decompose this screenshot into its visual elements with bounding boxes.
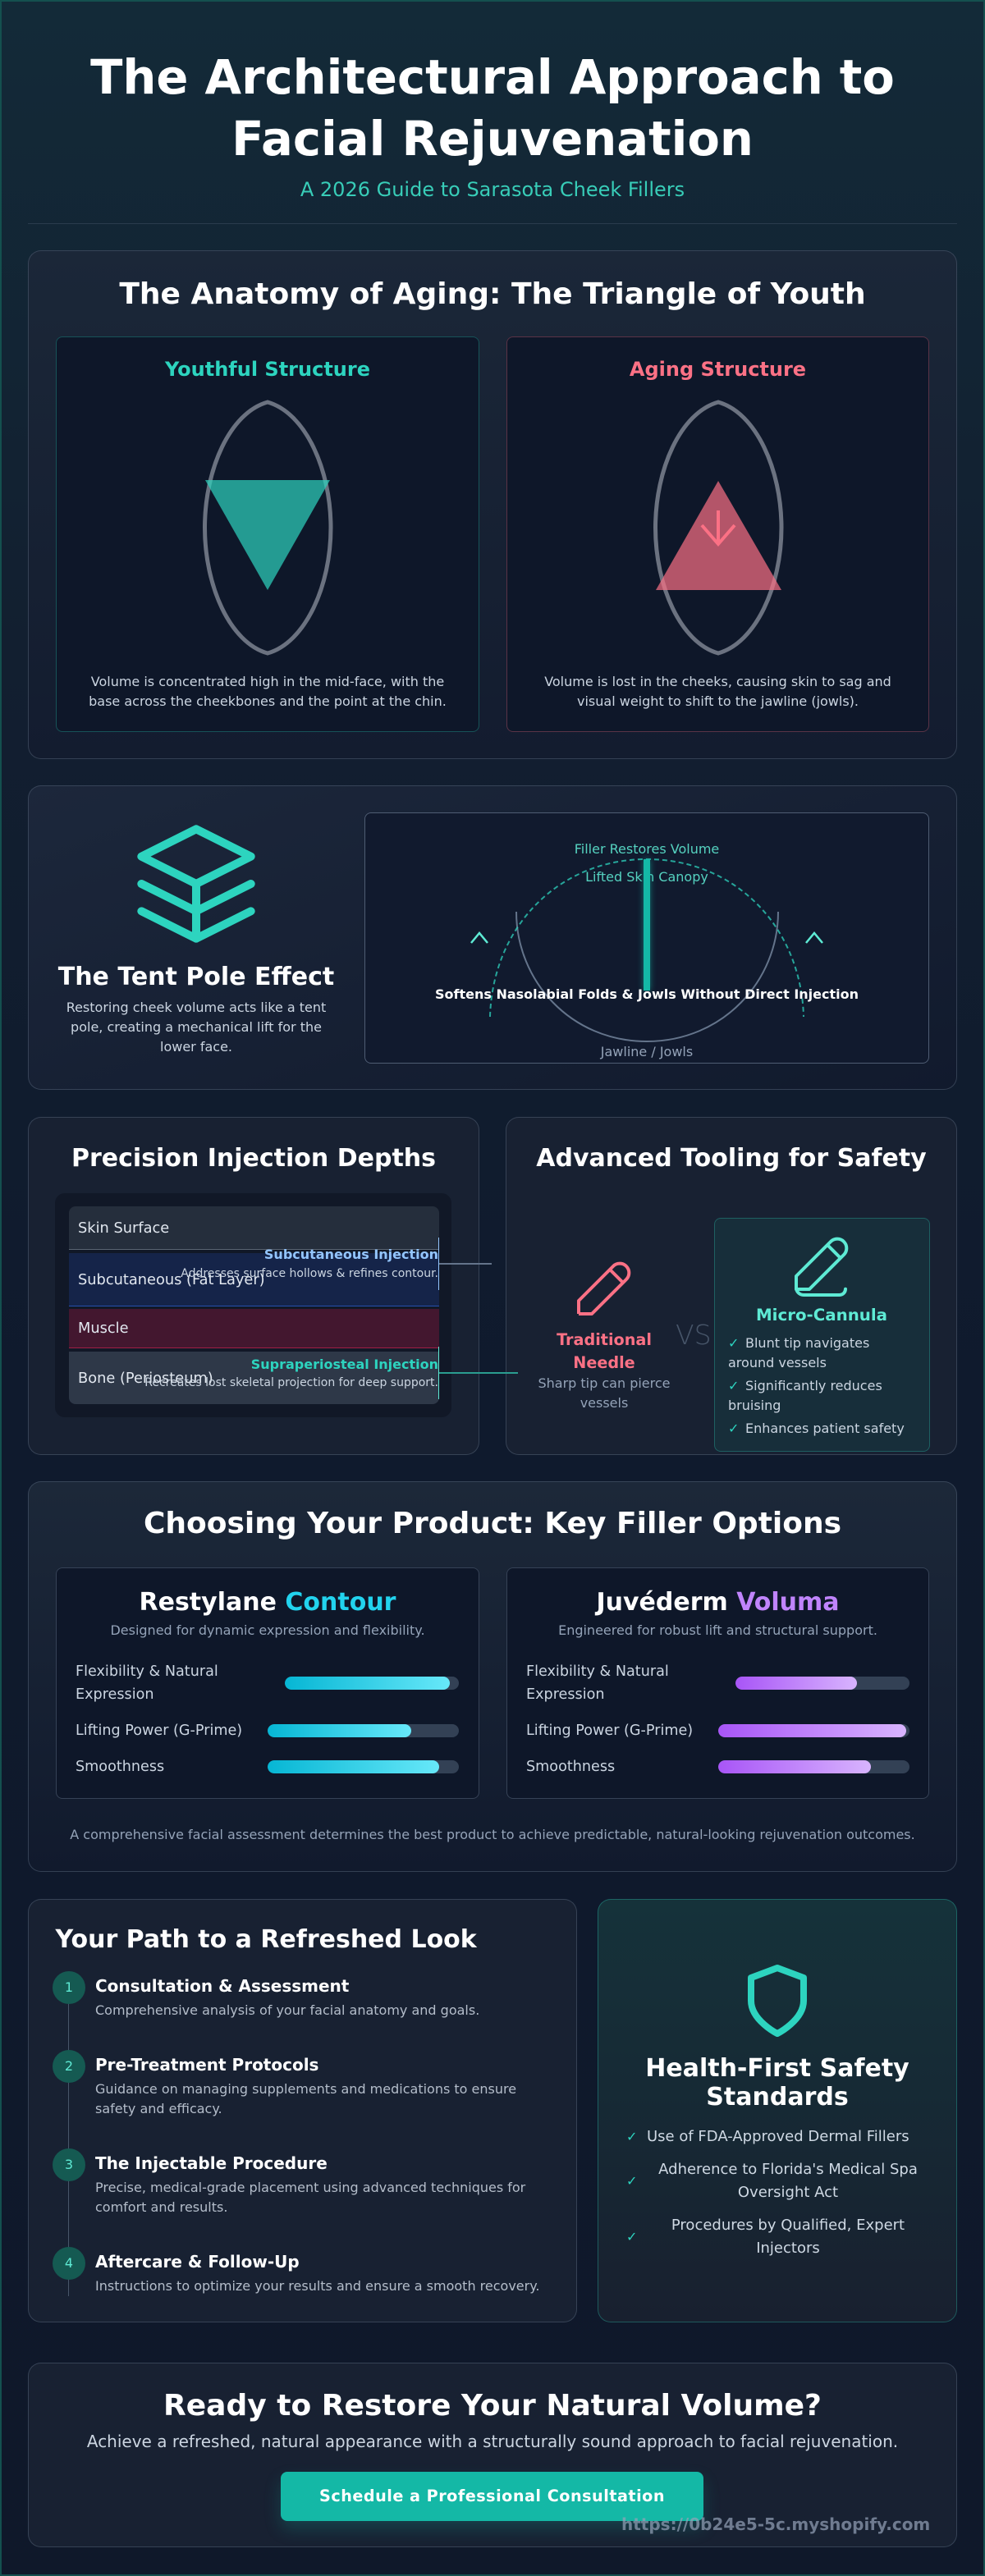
step title: Aftercare & Follow-Up (95, 2252, 300, 2272)
layer: fat (69, 1253, 439, 1306)
diagram drawing: Softens Nasolabial Folds & Jowls Without Direct Injection (435, 986, 859, 1002)
item 1 (626, 2128, 909, 2145)
heading: Standards (706, 2083, 849, 2111)
step 2 (53, 2050, 516, 2116)
benefit list (728, 1335, 905, 1436)
needle title: Traditional (557, 1330, 652, 1349)
subheading: Achieve a refreshed, natural appearance with a structurally sound approach to facial rejuvenation. (87, 2432, 898, 2451)
step number (53, 2247, 85, 2280)
connector (439, 1263, 492, 1265)
callout title: Supraperiosteal Injection (251, 1357, 438, 1372)
benefit list: around vessels Significantly reduces (728, 1355, 882, 1393)
icon: layered tent (137, 825, 255, 943)
metric: flexibility: Expression (526, 1686, 605, 1703)
step title: The Injectable Procedure (95, 2153, 328, 2173)
bar: smoothness (718, 1760, 909, 1773)
heading: Choosing Your Product: Key Filler Options (144, 1507, 841, 1540)
panel: triangle of youth (28, 250, 957, 759)
title: The Architectural Approach to (90, 50, 895, 105)
check: ✓ (626, 2129, 637, 2144)
header (28, 0, 957, 224)
metric: flexibility: Flexibility & Natural (76, 1663, 218, 1680)
panel: call to action (28, 2363, 957, 2547)
item text: Adherence to Florida's Medical Spa (658, 2161, 918, 2178)
diagram drawing: Jawline / Jowls (600, 1044, 693, 1059)
product description: Designed for dynamic expression and flexibility. (110, 1622, 425, 1638)
item text (658, 2161, 918, 2201)
footnote: A comprehensive facial assessment determines the best product to achieve predictable, natural-looking rejuvenation outcomes. (70, 1827, 915, 1842)
card: juvederm voluma (506, 1567, 929, 1799)
heading: Health-First Safety (645, 2053, 909, 2083)
step number: 3 (65, 2157, 73, 2172)
caption: Volume is lost in the cheeks, causing skin to sag and (544, 674, 891, 689)
step 3 (53, 2148, 525, 2214)
layer: skin (69, 1206, 439, 1250)
heading: Ready to Restore Your Natural Volume? (163, 2389, 822, 2423)
icon: shield (748, 1965, 807, 2037)
step number: 1 (65, 1979, 73, 1995)
heading: Precision Injection Depths (71, 1144, 436, 1173)
icon: needle (577, 1262, 630, 1315)
callout text: Recreates lost skeletal projection for deep support. (144, 1376, 438, 1389)
callout: subcutaneous (69, 1238, 439, 1290)
benefit list: bruising Enhances patient safety (728, 1398, 905, 1436)
heading: Your Path to a Refreshed Look (56, 1925, 477, 1954)
button: Schedule a Professional Consultation (319, 2487, 665, 2505)
caption (89, 674, 447, 709)
title: Facial Rejuvenation (231, 112, 754, 167)
callout title: Subcutaneous Injection (264, 1247, 438, 1262)
diagram: youthful face triangle (203, 400, 333, 655)
metric: lifting: Lifting Power (G-Prime) (526, 1723, 693, 1739)
metric: smoothness: Smoothness (76, 1759, 164, 1775)
caption (544, 674, 891, 709)
description: Restoring cheek volume acts like a tent (66, 1000, 326, 1015)
caption: base across the cheekbones and the point at the chin. (89, 693, 447, 709)
product description: Engineered for robust lift and structural support. (558, 1622, 877, 1638)
step number: 4 (65, 2255, 73, 2271)
callout text: Addresses surface hollows & refines contour. (181, 1267, 438, 1280)
description: pole, creating a mechanical lift for the (71, 1019, 322, 1035)
layer stack (55, 1193, 451, 1417)
item text: Use of FDA-Approved Dermal Fillers (647, 2128, 909, 2145)
diagram drawing (435, 841, 859, 1059)
step title: Pre-Treatment Protocols (95, 2055, 318, 2075)
step 4 (53, 2247, 540, 2293)
metric: flexibility: Flexibility & Natural (526, 1663, 669, 1680)
callout: supraperiosteal (69, 1347, 439, 1399)
title (90, 50, 895, 167)
diagram drawing: Lifted Skin Canopy (585, 869, 708, 885)
step text (95, 2180, 525, 2214)
layer: muscle (69, 1309, 439, 1348)
heading: The Anatomy of Aging: The Triangle of Youth (119, 277, 866, 311)
step text: comfort and results. (95, 2199, 227, 2214)
metric: lifting: Lifting Power (G-Prime) (76, 1723, 242, 1739)
metric: flexibility (76, 1663, 218, 1703)
card: aging structure (506, 336, 929, 732)
item text: Injectors (756, 2239, 820, 2257)
description (66, 1000, 326, 1055)
heading (645, 2053, 909, 2111)
step number (53, 1971, 85, 2004)
step text: Precise, medical-grade placement using advanced techniques for (95, 2180, 525, 2194)
panel: path to a refreshed look (28, 1899, 577, 2322)
metric: flexibility: Expression (76, 1686, 154, 1703)
card: restylane contour (56, 1567, 479, 1799)
caption: Volume is concentrated high in the mid-face, with the (91, 674, 444, 689)
step text: safety and efficacy. (95, 2101, 222, 2116)
step title: Consultation & Assessment (95, 1976, 349, 1996)
bar: smoothness (268, 1760, 459, 1773)
heading: The Tent Pole Effect (58, 963, 334, 991)
check: ✓ (626, 2229, 637, 2244)
step text: Instructions to optimize your results and ensure a smooth recovery. (95, 2278, 540, 2293)
card: micro-cannula (714, 1218, 929, 1452)
step number: 2 (65, 2058, 73, 2074)
diagram: aging face triangle (653, 400, 783, 655)
bar: lifting (718, 1724, 909, 1737)
panel: tent pole effect (28, 785, 957, 1090)
card: youthful structure (56, 336, 479, 732)
product name: Restylane Contour (140, 1588, 396, 1617)
diagram: tent pole (364, 812, 929, 1064)
metric: smoothness: Smoothness (526, 1759, 615, 1775)
check: ✓ (626, 2173, 637, 2189)
connector (439, 1372, 518, 1374)
benefit list: ✓ (728, 1421, 739, 1436)
cannula title: Micro-Cannula (756, 1306, 887, 1325)
layer: bone: Bone (Periosteum) (78, 1369, 213, 1387)
product name: Juvéderm Voluma (596, 1588, 840, 1617)
layer: fat: Subcutaneous (Fat Layer) (78, 1270, 265, 1288)
item text: Procedures by Qualified, Expert (671, 2216, 905, 2234)
diagram drawing: Filler Restores Volume (575, 841, 719, 857)
button (281, 2472, 703, 2521)
needle text: Sharp tip can pierce (538, 1375, 671, 1391)
needle title: Needle (573, 1353, 635, 1372)
caption: visual weight to shift to the jawline (jowls). (577, 693, 859, 709)
bar: flexibility (735, 1677, 909, 1690)
bar: lifting (268, 1724, 459, 1737)
layer: muscle: Muscle (78, 1320, 129, 1337)
item text (671, 2216, 905, 2257)
step text (95, 2081, 516, 2116)
benefit list: ✓ (728, 1335, 739, 1351)
item text: Oversight Act (738, 2184, 838, 2201)
needle title (557, 1330, 652, 1372)
step number (53, 2148, 85, 2181)
icon: cannula (795, 1238, 849, 1297)
step text: Guidance on managing supplements and medications to ensure (95, 2081, 516, 2096)
layer: bone (69, 1352, 439, 1404)
benefit list: Blunt tip navigates (745, 1335, 869, 1351)
bar: flexibility (285, 1677, 459, 1690)
heading: Advanced Tooling for Safety (536, 1144, 927, 1173)
panel: key filler options (28, 1481, 957, 1872)
benefit list: ✓ (728, 1378, 739, 1393)
timeline line (68, 2004, 69, 2296)
source url: https://0b24e5-5c.myshopify.com (621, 2514, 930, 2534)
description: lower face. (160, 1039, 232, 1055)
needle text (538, 1375, 671, 1411)
step 1 (53, 1971, 479, 2017)
step text: Comprehensive analysis of your facial anatomy and goals. (95, 2002, 479, 2017)
layer: skin: Skin Surface (78, 1219, 169, 1236)
needle text: vessels (580, 1395, 628, 1411)
item 3 (626, 2216, 905, 2257)
card heading: Aging Structure (630, 358, 806, 381)
panel: safety standards (598, 1899, 957, 2322)
panel: precision injection depths (28, 1117, 479, 1455)
card heading: Youthful Structure (165, 358, 370, 381)
step number (53, 2050, 85, 2083)
subtitle: A 2026 Guide to Sarasota Cheek Fillers (300, 178, 685, 201)
item 2 (626, 2161, 918, 2201)
panel: advanced tooling (506, 1117, 957, 1455)
metric: flexibility (526, 1663, 669, 1703)
vs label: VS (676, 1319, 712, 1351)
